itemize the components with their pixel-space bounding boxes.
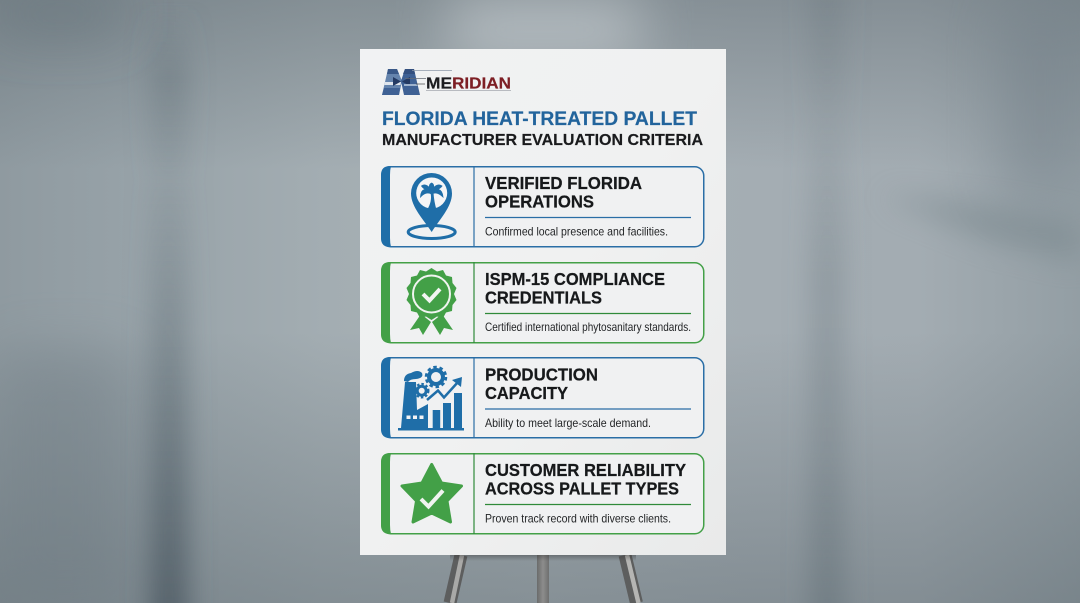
logo: Meridian: RIDIAN <box>452 76 511 92</box>
icon: palm tree location pin <box>408 173 455 238</box>
heading: ISPM-15 COMPLIANCE <box>485 269 665 289</box>
panel: production capacity <box>381 357 704 438</box>
panel: verified Florida operations <box>381 166 704 247</box>
panel: production capacity: CAPACITY <box>485 383 568 403</box>
title: FLORIDA HEAT-TREATED PALLET <box>382 109 697 130</box>
logo: Meridian <box>382 69 511 95</box>
icon: factory, gears and rising chart <box>398 367 464 430</box>
icon: star with check <box>402 464 462 522</box>
description: Confirmed local presence and facilities. <box>485 224 668 238</box>
panel: ISPM-15 compliance credentials: CREDENTIALS <box>485 288 602 308</box>
panel: customer reliability across pallet types: ACROSS PALLET TYPES <box>485 478 679 498</box>
poster board <box>360 49 726 555</box>
description: Ability to meet large-scale demand. <box>485 416 651 430</box>
heading: CUSTOMER RELIABILITY <box>485 460 686 480</box>
description: Proven track record with diverse clients. <box>485 512 671 526</box>
easel legs <box>450 555 638 603</box>
description: Certified international phytosanitary standards. <box>485 320 691 334</box>
heading: PRODUCTION <box>485 364 598 384</box>
logo: Meridian: ME <box>426 76 452 92</box>
panel: verified Florida operations: OPERATIONS <box>485 192 594 212</box>
title: MANUFACTURER EVALUATION CRITERIA <box>382 132 703 149</box>
panel: ISPM-15 compliance credentials <box>381 262 704 343</box>
icon: rosette with check <box>406 268 456 335</box>
panel: customer reliability across pallet types <box>381 453 704 534</box>
heading: VERIFIED FLORIDA <box>485 173 642 193</box>
title <box>382 109 703 149</box>
logo mark <box>382 69 420 95</box>
